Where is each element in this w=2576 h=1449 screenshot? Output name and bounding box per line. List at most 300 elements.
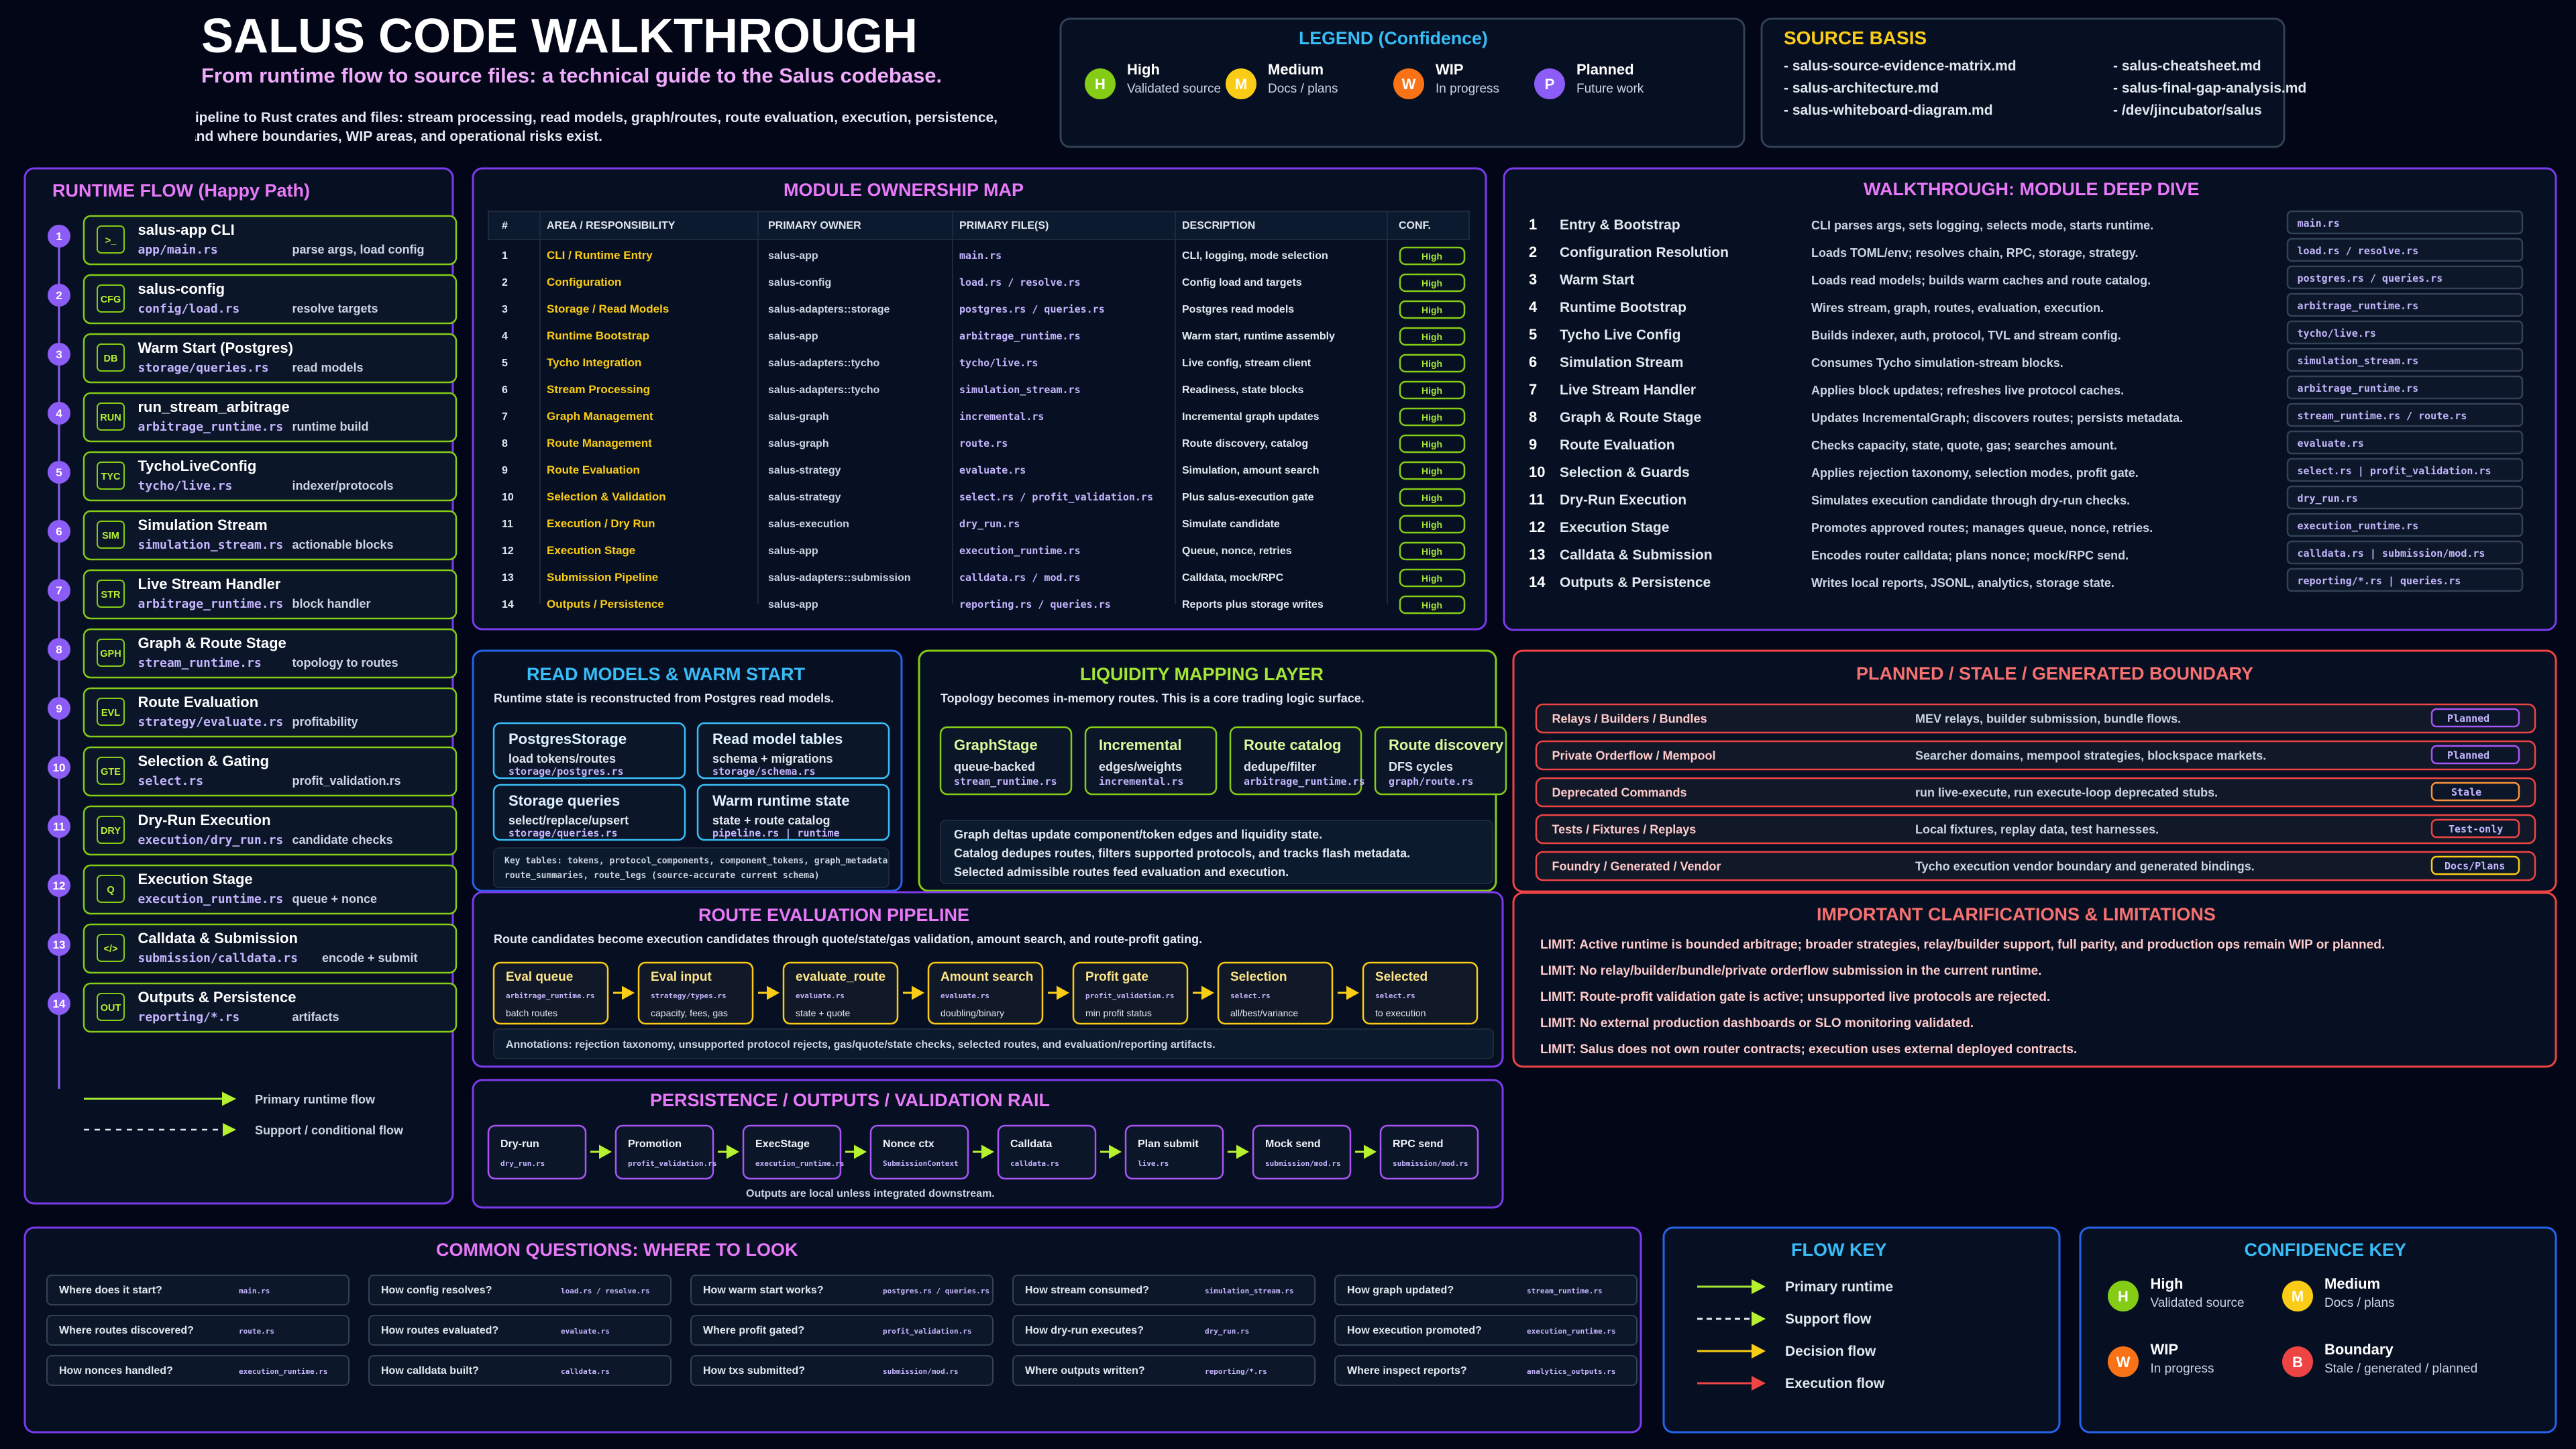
arrow [718, 1144, 739, 1159]
walkthrough row 4: Runtime Bootstrap [1560, 300, 1686, 315]
rail card: Nonce ctx: SubmissionContext [883, 1159, 959, 1168]
key: medium: M [2292, 1288, 2304, 1305]
walkthrough row 11: Dry-Run Execution [1560, 492, 1686, 508]
table row 10 [502, 489, 1464, 506]
panel: planned stale generated boundary [1513, 651, 2556, 892]
table row 6: High [1421, 385, 1442, 396]
intro text block: pipeline to Rust crates and files: stream processing, read models, graph/routes, route evaluation, execution, persistence, [186, 110, 998, 125]
table row 2: Configuration [547, 276, 621, 288]
panel: runtime flow: RUNTIME FLOW (Happy Path) [52, 180, 310, 201]
boundary row 5 [1536, 852, 2535, 880]
walkthrough row 9: Route Evaluation [1560, 437, 1675, 453]
question 6 [47, 1316, 349, 1345]
stage: Eval queue: batch routes [506, 1008, 557, 1018]
boundary row 5: Tycho execution vendor boundary and generated bindings. [1915, 860, 2255, 873]
rail card: Promotion: Promotion [628, 1138, 682, 1150]
table row 10: Selection & Validation [547, 490, 666, 503]
boundary row 3: Deprecated Commands [1552, 786, 1687, 800]
panel: route evaluation pipeline: Route candidates become execution candidates through quote/state/gas validation, amount search, and route-profit gating. [494, 932, 1202, 946]
walkthrough row 11 [1529, 486, 2522, 508]
rail card: Plan submit: Plan submit [1138, 1138, 1199, 1150]
question 13 [691, 1356, 993, 1385]
panel: legend: W [1402, 76, 1416, 93]
walkthrough row 14: Outputs & Persistence [1560, 575, 1711, 590]
panel: important clarifications and limitations [1513, 893, 2556, 1067]
rail card: RPC send [1381, 1126, 1478, 1179]
step 7: arbitrage_runtime.rs [138, 597, 283, 611]
key: primary [1697, 1279, 1893, 1295]
walkthrough row 2: Loads TOML/env; resolves chain, RPC, storage, strategy. [1811, 246, 2138, 260]
step 3: read models [292, 361, 364, 374]
stage: Profit gate: min profit status [1085, 1008, 1152, 1018]
stage: Amount search: doubling/binary [941, 1008, 1004, 1018]
step 4: runtime build [292, 420, 369, 433]
walkthrough row 11: Simulates execution candidate through dry-run checks. [1811, 494, 2130, 507]
table header [488, 211, 1469, 604]
walkthrough row 6 [1529, 349, 2522, 371]
walkthrough row 12: 12 [1529, 519, 1545, 535]
step 2: 2 [56, 289, 62, 302]
step 11: Dry-Run Execution [138, 812, 271, 828]
step 11: 11 [53, 820, 65, 833]
table row 9: Simulation, amount search [1182, 465, 1319, 476]
walkthrough row 10 [1529, 459, 2522, 481]
table row 6: 6 [502, 384, 508, 396]
question 15: Where inspect reports? [1347, 1365, 1467, 1377]
table row 10: salus-strategy [768, 492, 841, 503]
rail card: Mock send [1253, 1126, 1350, 1179]
card: Incremental [1085, 727, 1216, 794]
step 9 [48, 688, 456, 737]
table row 2: salus-config [768, 277, 831, 288]
boundary row 5: Foundry / Generated / Vendor [1552, 860, 1721, 873]
rail card: Plan submit: live.rs [1138, 1159, 1169, 1168]
question 2: How config resolves? [381, 1285, 492, 1296]
step 10: select.rs [138, 774, 203, 788]
step 12: Q [107, 885, 115, 896]
walkthrough row 6: simulation_stream.rs [2297, 355, 2418, 367]
step 4 [48, 393, 456, 441]
step 9: EVL [101, 708, 120, 718]
question 15: analytics_outputs.rs [1527, 1367, 1615, 1376]
table row 14 [502, 596, 1464, 613]
panel: module ownership map: MODULE OWNERSHIP MAP [784, 180, 1024, 200]
table row 13: calldata.rs / mod.rs [959, 572, 1081, 584]
question 11: execution_runtime.rs [239, 1367, 327, 1376]
step 4: run_stream_arbitrage [138, 398, 290, 415]
stage: Eval input: capacity, fees, gas [651, 1008, 728, 1018]
table row 9: Route Evaluation [547, 464, 640, 476]
step 5: TychoLiveConfig [138, 458, 256, 474]
table row 2: load.rs / resolve.rs [959, 276, 1081, 288]
walkthrough row 12: execution_runtime.rs [2297, 520, 2418, 532]
step 7 [48, 570, 456, 619]
step 5: indexer/protocols [292, 479, 394, 492]
question 1: Where does it start? [59, 1285, 162, 1296]
step 9: 9 [56, 702, 62, 715]
arrow [758, 986, 780, 1000]
step 3: DB [104, 354, 117, 364]
walkthrough row 8: Updates IncrementalGraph; discovers routes; persists metadata. [1811, 411, 2183, 425]
panel: important clarifications and limitations: LIMIT: No relay/builder/bundle/private orderflow submission in the current runtime. [1540, 964, 2041, 978]
step 12: 12 [53, 879, 65, 892]
rail card: Plan submit [1126, 1126, 1223, 1179]
stage: Eval input: Eval input [651, 970, 712, 984]
step 12: Execution Stage [138, 871, 253, 888]
walkthrough row 5: Builds indexer, auth, protocol, TVL and stream config. [1811, 329, 2121, 342]
table row 1: CLI / Runtime Entry [547, 249, 653, 262]
question 4: How stream consumed? [1025, 1285, 1149, 1296]
question 14 [1013, 1356, 1315, 1385]
table row 3 [502, 301, 1464, 318]
stage: Selected: Selected [1375, 970, 1428, 984]
panel: legend: Future work [1576, 82, 1644, 96]
panel: runtime flow [25, 168, 456, 1203]
panel: source basis: - salus-final-gap-analysis.md [2113, 80, 2306, 96]
panel: important clarifications and limitations: LIMIT: Salus does not own router contracts; execution uses external deployed contracts. [1540, 1042, 2077, 1057]
panel: legend: High [1127, 61, 1160, 78]
question 12: calldata.rs [561, 1367, 610, 1376]
table row 2: 2 [502, 277, 508, 288]
table header: # [502, 220, 508, 231]
table row 3: Postgres read models [1182, 304, 1294, 315]
panel: common questions: COMMON QUESTIONS: WHERE TO LOOK [436, 1240, 798, 1260]
table row 14: Outputs / Persistence [547, 598, 664, 610]
walkthrough row 2: load.rs / resolve.rs [2297, 245, 2418, 257]
walkthrough row 14: reporting/*.rs | queries.rs [2297, 575, 2461, 588]
walkthrough row 6: Simulation Stream [1560, 355, 1683, 370]
card: Route discovery: DFS cycles [1389, 760, 1453, 773]
table row 2: High [1421, 278, 1442, 288]
table row 1: CLI, logging, mode selection [1182, 250, 1328, 262]
step 14: 14 [53, 998, 66, 1010]
step 1 [48, 216, 456, 264]
step 1: 1 [56, 230, 62, 243]
arrow [1228, 1144, 1249, 1159]
table row 4: 4 [502, 331, 508, 342]
panel: persistence outputs validation rail: PERSISTENCE / OUTPUTS / VALIDATION RAIL [650, 1090, 1050, 1110]
step 5 [48, 452, 456, 500]
panel: read models and warm start [473, 651, 902, 891]
table row 14: High [1421, 600, 1442, 610]
rail card: ExecStage: execution_runtime.rs [755, 1159, 844, 1168]
table row 12: Queue, nonce, retries [1182, 545, 1292, 557]
step 14 [48, 983, 456, 1032]
walkthrough row 14: 14 [1529, 574, 1546, 590]
table row 4: Warm start, runtime assembly [1182, 331, 1335, 342]
panel: common questions [25, 1228, 1641, 1432]
card: Warm runtime state [698, 785, 889, 840]
note: annotations: Annotations: rejection taxonomy, unsupported protocol rejects, gas/quote/state checks, selected routes, and evaluation/reporting artifacts. [506, 1039, 1216, 1051]
walkthrough row 7: arbitrage_runtime.rs [2297, 382, 2418, 394]
step 9: profitability [292, 715, 358, 729]
stage: evaluate_route [784, 963, 898, 1024]
arrow [1355, 1144, 1377, 1159]
step 12: execution_runtime.rs [138, 892, 283, 906]
step 13: 13 [53, 938, 65, 951]
table row 11: salus-execution [768, 519, 849, 530]
stage: Amount search: evaluate.rs [941, 991, 989, 1000]
table row 9: 9 [502, 465, 508, 476]
key: WIP: W [2116, 1354, 2131, 1371]
rail card: RPC send: submission/mod.rs [1393, 1159, 1468, 1168]
step 7: Live Stream Handler [138, 576, 281, 592]
step 12 [48, 865, 456, 914]
walkthrough row 9: evaluate.rs [2297, 437, 2364, 449]
stage: Profit gate: profit_validation.rs [1085, 991, 1174, 1000]
question 7: evaluate.rs [561, 1327, 610, 1336]
table row 5: Live config, stream client [1182, 358, 1311, 369]
stage: Selected [1363, 963, 1477, 1024]
walkthrough row 10: Applies rejection taxonomy, selection modes, profit gate. [1811, 466, 2139, 480]
note: graph deltas: Graph deltas update component/token edges and liquidity state. [954, 828, 1322, 841]
walkthrough row 7: Live Stream Handler [1560, 382, 1696, 398]
card: Incremental: Incremental [1099, 737, 1182, 753]
boundary row 3: Stale [2451, 786, 2481, 798]
key: boundary: B [2292, 1354, 2303, 1371]
table row 9: salus-strategy [768, 465, 841, 476]
walkthrough row 3: Loads read models; builds warm caches and route catalog. [1811, 274, 2151, 287]
question 2 [369, 1275, 671, 1305]
step 8: topology to routes [292, 656, 398, 669]
table row 3: postgres.rs / queries.rs [959, 303, 1105, 315]
table row 11: Execution / Dry Run [547, 517, 655, 530]
card: Warm runtime state: Warm runtime state [712, 792, 850, 809]
walkthrough row 12 [1529, 514, 2522, 536]
legend: primary runtime flow arrow [84, 1092, 376, 1106]
table row 6: Readiness, state blocks [1182, 384, 1304, 396]
stage: Amount search: Amount search [941, 970, 1033, 984]
panel: source basis: - salus-whiteboard-diagram.md [1784, 103, 1993, 118]
title: SALUS CODE WALKTHROUGH [201, 9, 918, 63]
card: Route discovery: Route discovery [1389, 737, 1504, 753]
key: WIP [2108, 1341, 2214, 1377]
card: Route discovery: graph/route.rs [1389, 775, 1473, 788]
walkthrough row 2: Configuration Resolution [1560, 245, 1729, 260]
table row 10: select.rs / profit_validation.rs [959, 491, 1153, 503]
table row 8: Route discovery, catalog [1182, 438, 1308, 449]
question 5 [1335, 1275, 1637, 1305]
table row 2: Config load and targets [1182, 277, 1302, 288]
panel: persistence outputs validation rail [473, 1080, 1503, 1208]
boundary row 2: Searcher domains, mempool strategies, blockspace markets. [1915, 749, 2266, 762]
table row 13: Calldata, mock/RPC [1182, 572, 1284, 584]
stage: Eval input: strategy/types.rs [651, 991, 727, 1000]
table row 7: incremental.rs [959, 411, 1044, 423]
boundary row 5: Docs/Plans [2445, 860, 2505, 872]
question 4: simulation_stream.rs [1205, 1287, 1293, 1295]
table row 10: Plus salus-execution gate [1182, 492, 1314, 503]
question 6: route.rs [239, 1327, 274, 1336]
question 13: How txs submitted? [703, 1365, 805, 1377]
arrow [1048, 986, 1069, 1000]
table row 13 [502, 570, 1464, 586]
step 1: salus-app CLI [138, 221, 235, 238]
question 5: stream_runtime.rs [1527, 1287, 1603, 1295]
walkthrough row 7: 7 [1529, 381, 1537, 398]
walkthrough row 13: Encodes router calldata; plans nonce; mock/RPC send. [1811, 549, 2129, 562]
table row 8: 8 [502, 438, 508, 449]
table row 8 [502, 435, 1464, 452]
panel: source basis [1762, 19, 2306, 147]
panel: source basis: - salus-architecture.md [1784, 80, 1939, 96]
walkthrough row 8: Graph & Route Stage [1560, 410, 1701, 425]
panel: legend: LEGEND (Confidence) [1299, 28, 1488, 48]
table row 4: salus-app [768, 331, 818, 342]
rail card: Nonce ctx [871, 1126, 968, 1179]
step 10: profit_validation.rs [292, 774, 401, 788]
table row 7: Graph Management [547, 410, 653, 423]
step 13: encode + submit [322, 951, 418, 965]
question 12 [369, 1356, 671, 1385]
step 8: Graph & Route Stage [138, 635, 286, 651]
legend: support flow arrow [84, 1123, 404, 1137]
panel: legend [1061, 19, 1744, 147]
stage: Selection: select.rs [1230, 991, 1271, 1000]
step 2 [48, 275, 456, 323]
key: support [1697, 1311, 1872, 1327]
key: medium: Docs / plans [2324, 1296, 2395, 1310]
rail card: ExecStage [743, 1126, 844, 1179]
step 3: 3 [56, 348, 62, 361]
card: PostgresStorage: PostgresStorage [508, 731, 627, 747]
stage: Eval queue [494, 963, 608, 1024]
walkthrough row 10: Selection & Guards [1560, 465, 1690, 480]
walkthrough row 10: select.rs | profit_validation.rs [2297, 465, 2491, 478]
question 10: execution_runtime.rs [1527, 1327, 1615, 1336]
stage: evaluate_route: evaluate.rs [796, 991, 845, 1000]
card: Route catalog [1230, 727, 1365, 794]
question 1: main.rs [239, 1287, 270, 1295]
key: WIP: In progress [2151, 1362, 2214, 1376]
step 5: tycho/live.rs [138, 479, 232, 493]
table header: CONF. [1399, 220, 1431, 231]
table row 3: High [1421, 305, 1442, 315]
question 2: load.rs / resolve.rs [561, 1287, 649, 1295]
table row 8: salus-graph [768, 438, 829, 449]
step 2: salus-config [138, 280, 225, 297]
stage: Profit gate [1073, 963, 1187, 1024]
panel: liquidity mapping layer [919, 651, 1506, 891]
card: Incremental: edges/weights [1099, 760, 1182, 773]
step 11: execution/dry_run.rs [138, 833, 283, 847]
question 1 [47, 1275, 349, 1305]
card: Storage queries [494, 785, 685, 840]
panel: module ownership map [473, 168, 1486, 629]
panel: liquidity mapping layer: LIQUIDITY MAPPING LAYER [1080, 664, 1324, 684]
table row 7: High [1421, 412, 1442, 423]
step 8: GPH [100, 649, 121, 659]
step 7: STR [101, 590, 121, 600]
card: Storage queries: Storage queries [508, 792, 620, 809]
table row 9 [502, 462, 1464, 479]
walkthrough row 1: CLI parses args, sets logging, selects mode, starts runtime. [1811, 219, 2153, 232]
walkthrough row 9 [1529, 431, 2522, 453]
panel: planned stale generated boundary: PLANNED / STALE / GENERATED BOUNDARY [1856, 663, 2253, 684]
card: GraphStage: GraphStage [954, 737, 1038, 753]
walkthrough row 12: Promotes approved routes; manages queue, nonce, retries. [1811, 521, 2153, 535]
walkthrough row 13: calldata.rs | submission/mod.rs [2297, 547, 2485, 560]
rail card: Promotion: profit_validation.rs [628, 1159, 716, 1168]
table row 9: High [1421, 466, 1442, 476]
question 10 [1335, 1316, 1637, 1345]
walkthrough row 10: 10 [1529, 464, 1545, 480]
card: Route catalog: dedupe/filter [1244, 760, 1316, 773]
question 9 [1013, 1316, 1315, 1345]
key: high: H [2118, 1288, 2129, 1305]
table row 12: High [1421, 546, 1442, 557]
step 9: strategy/evaluate.rs [138, 715, 283, 729]
walkthrough row 4: arbitrage_runtime.rs [2297, 300, 2418, 312]
stage: Selected: select.rs [1375, 991, 1415, 1000]
stage: Amount search [928, 963, 1042, 1024]
table row 13: Submission Pipeline [547, 571, 658, 584]
rail card: Calldata [998, 1126, 1095, 1179]
card: Route discovery [1375, 727, 1506, 794]
panel: walkthrough module deep dive [1504, 168, 2556, 630]
key: boundary: Boundary [2324, 1341, 2394, 1358]
panel: flow key: FLOW KEY [1791, 1240, 1886, 1260]
stage: Eval queue: arbitrage_runtime.rs [506, 991, 594, 1000]
panel: legend: H [1095, 76, 1106, 93]
boundary row 1: Relays / Builders / Bundles [1552, 712, 1707, 726]
panel: legend: Docs / plans [1268, 82, 1338, 96]
table row 12 [502, 543, 1464, 559]
question 14: reporting/*.rs [1205, 1367, 1267, 1376]
table row 12: execution_runtime.rs [959, 545, 1081, 557]
walkthrough row 9: 9 [1529, 436, 1537, 453]
arrow [1338, 986, 1359, 1000]
walkthrough row 14: Writes local reports, JSONL, analytics, storage state. [1811, 576, 2114, 590]
card: Storage queries: storage/queries.rs [508, 827, 618, 839]
table row 7 [502, 409, 1464, 425]
question 3: postgres.rs / queries.rs [883, 1287, 989, 1295]
step 2: config/load.rs [138, 302, 239, 316]
step 8: 8 [56, 643, 62, 656]
key: execution: Execution flow [1785, 1376, 1885, 1391]
stage: Selected: to execution [1375, 1008, 1426, 1018]
step 13 [48, 924, 456, 973]
card: Read model tables [698, 723, 889, 778]
question 12: How calldata built? [381, 1365, 479, 1377]
question 14: Where outputs written? [1025, 1365, 1145, 1377]
step 14: OUT [101, 1003, 121, 1014]
step 5: TYC [101, 472, 121, 482]
boundary row 4 [1536, 815, 2535, 843]
walkthrough row 1: main.rs [2297, 217, 2340, 229]
question 5: How graph updated? [1347, 1285, 1454, 1296]
step 10: Selection & Gating [138, 753, 269, 769]
key: primary: Primary runtime [1785, 1279, 1893, 1295]
table row 11: Simulate candidate [1182, 519, 1280, 530]
step 4: RUN [100, 413, 121, 423]
table header: DESCRIPTION [1182, 220, 1255, 231]
table row 14: salus-app [768, 599, 818, 610]
intro text block [186, 110, 998, 144]
panel: legend: P [1545, 76, 1554, 93]
step 10 [48, 747, 456, 796]
step 11: candidate checks [292, 833, 393, 847]
step 10: 10 [53, 761, 65, 774]
panel: legend: Medium [1268, 61, 1324, 78]
step 4: 4 [56, 407, 62, 420]
table row 7: Incremental graph updates [1182, 411, 1320, 423]
table row 2 [502, 274, 1464, 291]
step 9: Route Evaluation [138, 694, 258, 710]
table row 5: salus-adapters::tycho [768, 358, 879, 369]
table row 3: salus-adapters::storage [768, 304, 890, 315]
step 2: CFG [101, 294, 121, 305]
